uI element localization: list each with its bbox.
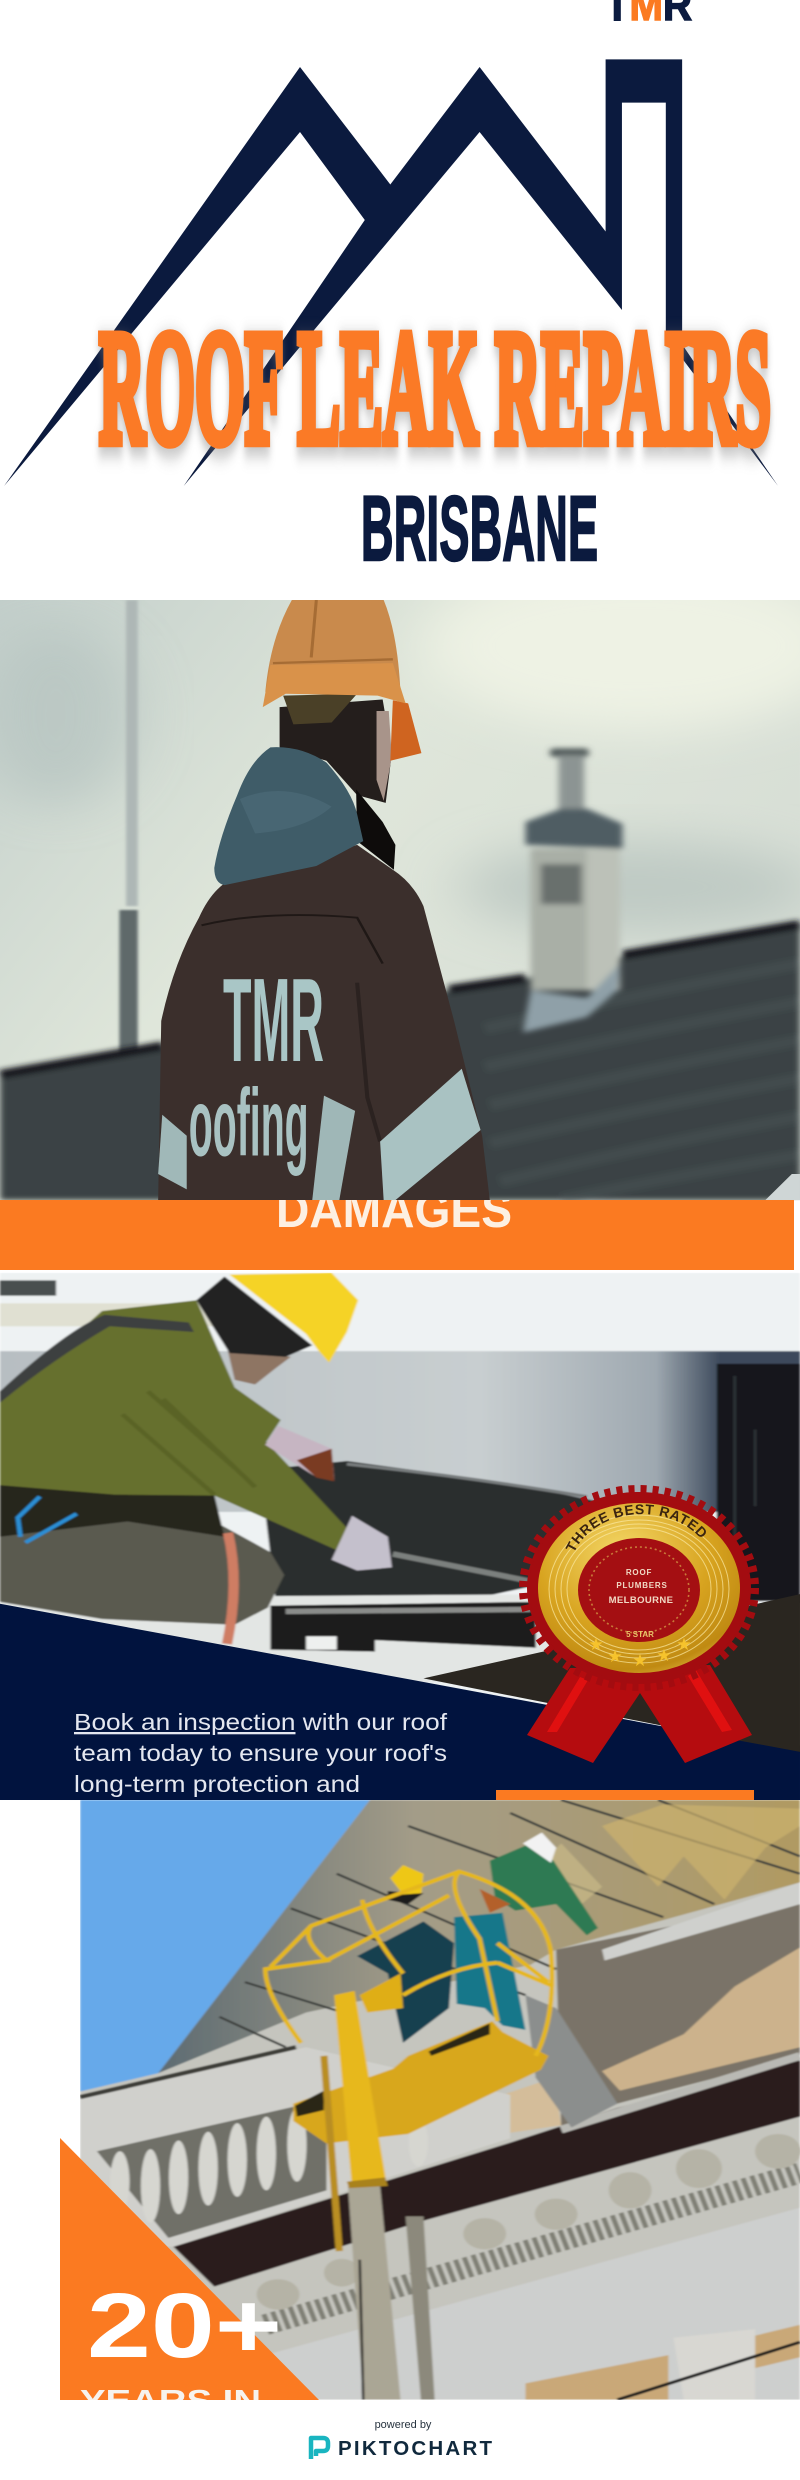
lift columns (348, 2186, 435, 2400)
badge stars: ★ (588, 1635, 604, 1655)
logo section (4, 0, 778, 580)
call to action text: long-term protection and (74, 1771, 360, 1797)
blue sky (80, 1800, 370, 2091)
ribbon tails (527, 1665, 752, 1763)
stat: 20+: 20+ (87, 2275, 282, 2377)
background pole (117, 600, 140, 1052)
logo: ROOF LEAK REPAIRS lettering: ROOF LEAK REPAIRS (99, 302, 771, 485)
orange headline bar (0, 1200, 794, 1270)
kneeling worker (0, 1273, 528, 1644)
membrane roll (260, 1461, 602, 1602)
badge centre text (609, 1568, 673, 1639)
roofer figure: TMR (223, 953, 324, 1087)
logo: roof and chimney outline (4, 59, 778, 486)
badge centre text: PLUMBERS (616, 1581, 668, 1590)
badge centre text: 5 STAR (626, 1630, 654, 1639)
logo: ROOF LEAK REPAIRS lettering: ROOF LEAK REPAIRS (99, 299, 771, 478)
roof deck (0, 1594, 561, 1682)
basket rails (265, 1872, 554, 2056)
badge stars: ★ (676, 1635, 692, 1655)
label: years in: YEARS IN (80, 2383, 261, 2418)
icon: Piktochart logo mark (311, 2438, 328, 2459)
badge centre text: MELBOURNE (609, 1595, 673, 1606)
badge stars: ★ (632, 1651, 648, 1671)
parapet and balustrade (80, 2047, 510, 2247)
reflective bands (380, 1069, 481, 1200)
call to action text: team today to ensure your roof's (74, 1740, 447, 1766)
background chimney (523, 748, 622, 1032)
call to action text: Book an inspection with our roof (74, 1709, 448, 1735)
photo: worker sealing roof membrane (0, 1273, 800, 1800)
cornice dentils (257, 2134, 800, 2400)
wordmark: PIKTOCHART: PIKTOCHART (338, 2437, 492, 2460)
logo: BRISBANE: BRISBANE (361, 477, 598, 580)
dark brown wedge (423, 1594, 800, 1753)
roofer figure (158, 600, 490, 1200)
badge stars: ★ (656, 1646, 672, 1666)
photo: workers on cherry picker repairing facade (80, 1800, 800, 2400)
workers in cage (357, 1833, 598, 2043)
navy panel (0, 1604, 800, 1800)
section: aerial lift photo and experience badge (60, 1800, 800, 2418)
badge: three best rated (519, 1485, 759, 1763)
dark gutter band (173, 2060, 800, 2287)
call to action text (74, 1709, 448, 1797)
hard hat (263, 600, 421, 761)
powered by: powered by (375, 2419, 432, 2431)
photo: roofer in TMR jacket looking at chimney (0, 562, 800, 1200)
badge arc text: THREE BEST RATED (565, 1504, 706, 1550)
badge stars: ★ (607, 1647, 623, 1667)
orange experience triangle (60, 2138, 319, 2400)
lower window (526, 2355, 668, 2400)
slate roof (158, 1800, 800, 2073)
roofer figure: oofing (189, 1069, 309, 1176)
footer: powered by Piktochart (311, 2419, 492, 2460)
blurred shingled roof (0, 925, 800, 1200)
orange button strip (496, 1790, 754, 1800)
section: damages and roof inspection (0, 1200, 800, 1800)
badge centre text: ROOF (626, 1568, 652, 1577)
damaged wall (556, 1900, 800, 2130)
lift arm and basket (265, 1872, 554, 2251)
headline: DAMAGES: DAMAGES (276, 1184, 512, 1238)
badge stars (590, 1638, 690, 1666)
spray jet (526, 1995, 617, 2127)
